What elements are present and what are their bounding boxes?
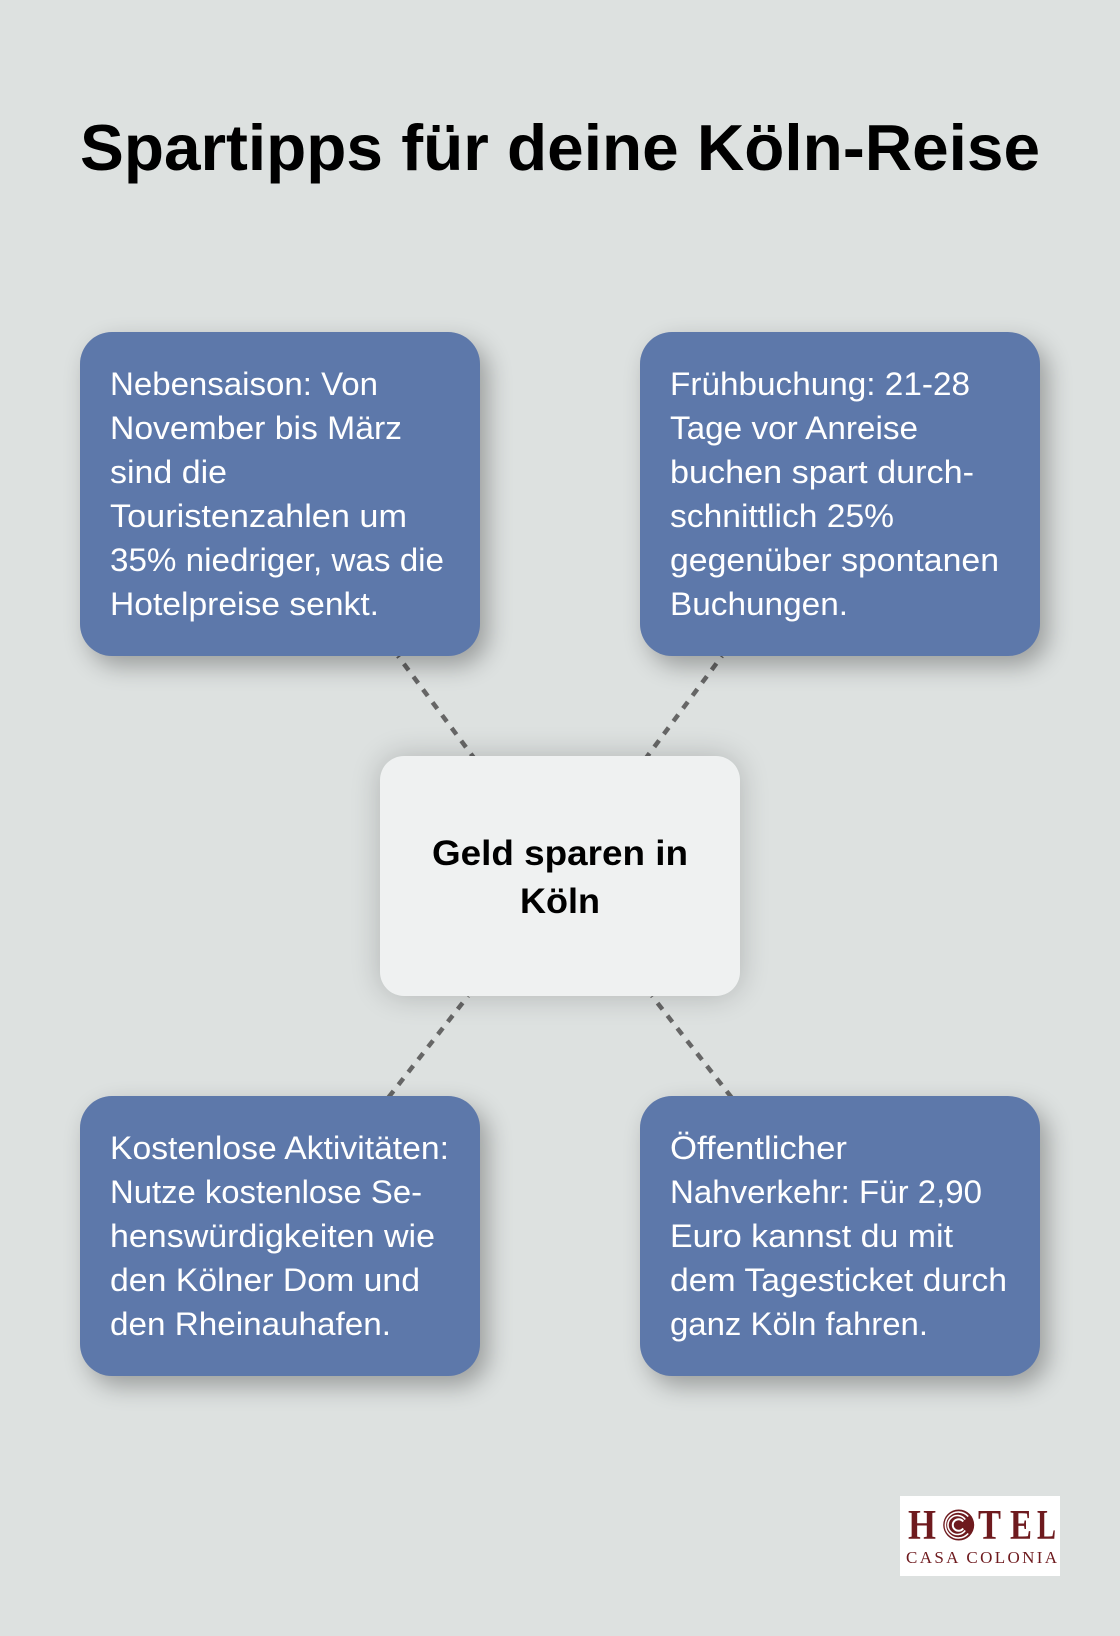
panel: Frühbuchung: buchen spart durch- (670, 454, 974, 490)
panel: Frühbuchung: gegenüber spontanen (670, 542, 999, 578)
panel: Kostenlose Aktivitäten: henswürdigkeiten wie (110, 1218, 435, 1254)
panel: Öffentlicher Nahverkehr: Euro kannst du mit (670, 1218, 953, 1254)
panel: Nebensaison: 35% niedriger, was die (110, 542, 444, 578)
panel: Nebensaison (80, 332, 480, 656)
panel: Kostenlose Aktivitäten: den Kölner Dom und (110, 1262, 420, 1298)
panel: Frühbuchung: Tage vor Anreise (670, 410, 918, 446)
panel: Nebensaison: Touristenzahlen um (110, 498, 407, 534)
panel: Nebensaison: Hotelpreise senkt. (110, 586, 379, 622)
logo: Hotel Casa Colonia: T (978, 1503, 1001, 1549)
logo: Hotel Casa Colonia: L (1037, 1503, 1056, 1549)
logo: Hotel Casa Colonia: H (908, 1503, 936, 1549)
panel: centre box (380, 756, 740, 996)
panel: Öffentlicher Nahverkehr: ganz Köln fahren. (670, 1306, 928, 1342)
panel: Öffentlicher Nahverkehr: dem Tagesticket durch (670, 1262, 1007, 1298)
panel: Kostenlose Aktivitäten: Kostenlose Aktivitäten: (110, 1130, 449, 1166)
panel: Nebensaison: November bis März (110, 410, 402, 446)
panel: centre box: Köln (520, 882, 600, 921)
panel: Kostenlose Aktivitäten (80, 1096, 480, 1376)
panel: Frühbuchung (640, 332, 1040, 656)
panel: Öffentlicher Nahverkehr: Öffentlicher (670, 1130, 847, 1166)
panel: Kostenlose Aktivitäten: den Rheinauhafen. (110, 1306, 391, 1342)
panel: Kostenlose Aktivitäten: Nutze kostenlose Se- (110, 1174, 422, 1210)
panel: Frühbuchung: Buchungen. (670, 586, 848, 622)
logo: Hotel Casa Colonia (900, 1496, 1060, 1576)
panel: Öffentlicher Nahverkehr: Nahverkehr: Für 2,90 (670, 1174, 982, 1210)
title: Spartipps für deine Köln-Reise (80, 111, 1040, 184)
logo: Hotel Casa Colonia: E (1010, 1503, 1032, 1549)
panel: Nebensaison: sind die (110, 454, 227, 490)
logo: Hotel Casa Colonia: CASA COLONIA (906, 1548, 1058, 1567)
panel: centre box: Geld sparen in (432, 834, 688, 873)
panel: Nebensaison: Nebensaison: Von (110, 366, 378, 402)
panel: Frühbuchung: schnittlich 25% (670, 498, 894, 534)
panel: Öffentlicher Nahverkehr (640, 1096, 1040, 1376)
panel: Frühbuchung: Frühbuchung: 21-28 (670, 366, 970, 402)
